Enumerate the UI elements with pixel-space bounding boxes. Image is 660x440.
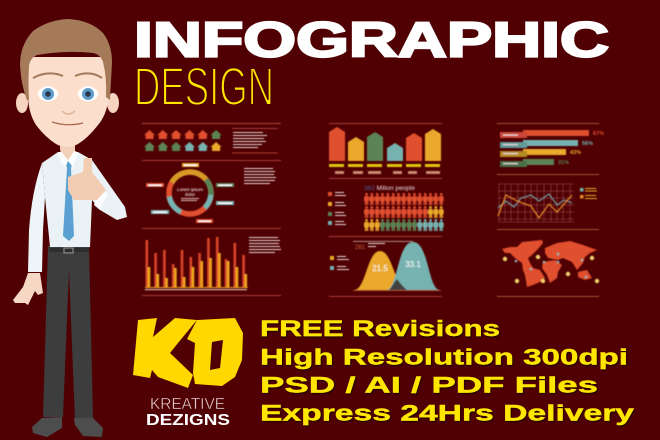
donut labels — [146, 163, 234, 223]
donut centre text: Lorem ipsum — [177, 187, 203, 192]
icon row: houses — [144, 130, 222, 151]
chart: world map — [502, 240, 599, 287]
logo text: KREATIVE: KREATIVE — [150, 396, 225, 413]
tie — [63, 161, 74, 241]
ears — [16, 93, 28, 113]
text block: bars caption — [249, 237, 281, 253]
chart: horizontal bars: 67% — [593, 131, 604, 137]
feature: High Resolution: High Resolution 300dpi — [260, 344, 628, 370]
belt buckle — [64, 248, 73, 253]
chart: horizontal bars: 56% — [582, 141, 593, 147]
shoes — [32, 417, 62, 437]
face — [28, 57, 109, 147]
donut centre text: dolor — [185, 192, 196, 197]
chart: bell curves: 21.5 — [372, 264, 388, 273]
panel: arrows, people and bell curves — [328, 123, 444, 297]
chart: monthly bars — [145, 237, 248, 290]
chart: horizontal bars: 43% — [570, 150, 581, 156]
donut centre text — [177, 187, 203, 201]
left eye — [38, 86, 58, 102]
chart: arrow columns — [329, 127, 441, 174]
logo text: DEZIGNS: DEZIGNS — [146, 412, 230, 429]
feature: Express delivery: Express 24Hrs Delivery — [260, 400, 635, 426]
legend: line chart — [580, 188, 597, 199]
right eye — [78, 86, 98, 102]
feature: FREE Revisions: FREE Revisions — [260, 316, 500, 341]
nose — [62, 111, 75, 114]
chart: line chart — [498, 184, 574, 222]
legend: people — [328, 192, 346, 225]
subtitle: DESIGN: DESIGN — [134, 57, 274, 117]
collar — [57, 150, 78, 168]
callout: bell curve note — [353, 241, 413, 251]
shirt — [42, 152, 127, 247]
logo: KD brush mark — [133, 318, 243, 388]
feature: File types: PSD / AI / PDF Files — [260, 372, 598, 398]
left sleeve — [28, 163, 45, 272]
chart: bell curves: 33.1 — [405, 260, 421, 269]
neck — [60, 138, 75, 160]
eyebrows — [33, 73, 63, 78]
feature list — [260, 316, 635, 426]
character: businessman giving thumbs up — [13, 19, 127, 437]
heading: Million people: 362 Milion people — [364, 185, 415, 192]
chart: bell curves — [353, 242, 441, 290]
panel: houses, donut and bars — [142, 123, 281, 296]
chart: horizontal bars — [500, 130, 604, 167]
chart: people pictogram — [364, 193, 444, 231]
title: INFOGRAPHIC: INFOGRAPHIC — [134, 14, 609, 68]
cuff — [94, 192, 108, 210]
panel: bars, line chart and map — [497, 123, 604, 297]
thumbs-up hand — [68, 158, 106, 200]
belt — [49, 248, 89, 252]
legs — [43, 246, 93, 420]
left hand — [13, 273, 43, 305]
hair — [20, 19, 112, 100]
chart: donut — [169, 172, 211, 214]
legend: bell curves — [330, 256, 349, 270]
mouth — [52, 122, 83, 125]
text block: donut caption — [244, 168, 276, 184]
callout: bell curve note: 281 — [355, 245, 366, 251]
chart: horizontal bars: 31% — [558, 160, 569, 166]
text block: house caption — [232, 128, 278, 154]
